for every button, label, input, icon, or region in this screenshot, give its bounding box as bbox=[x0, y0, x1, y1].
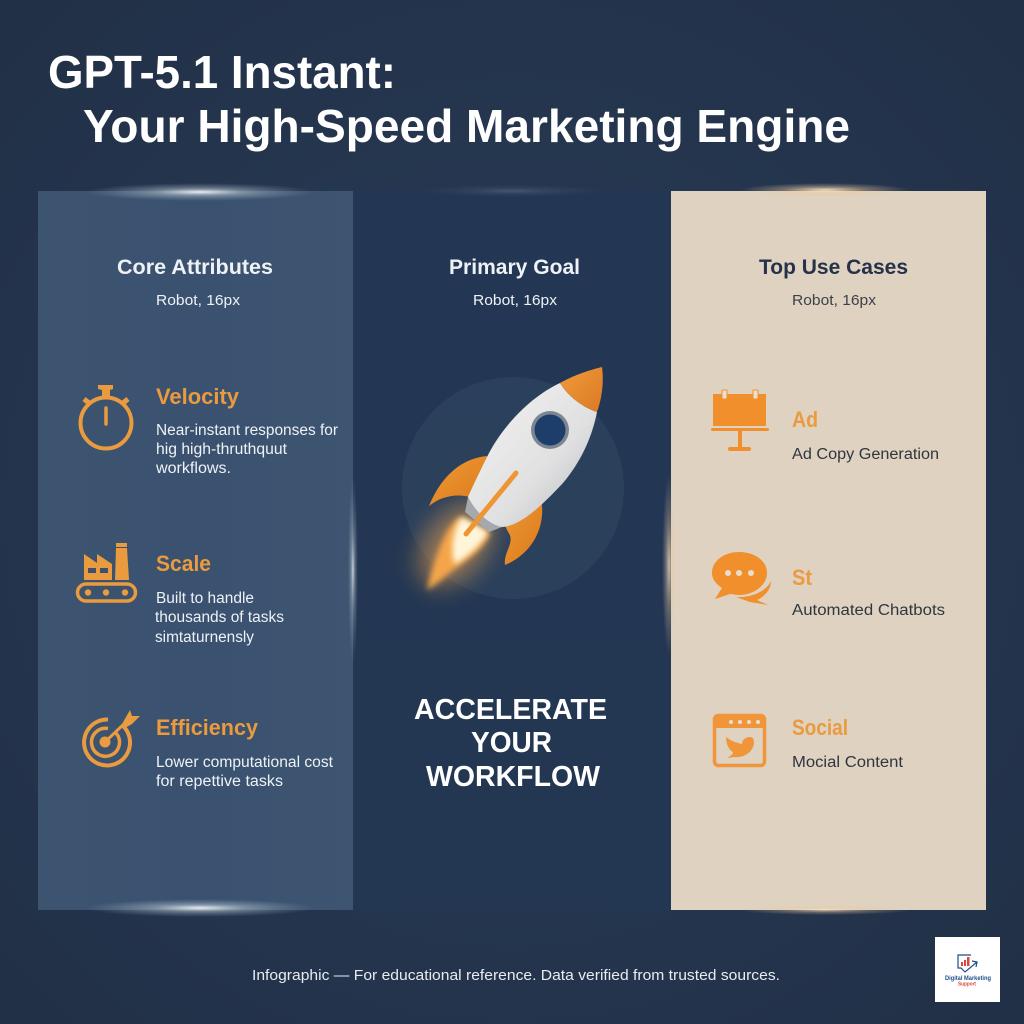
title: GPT-5.1 Instant: bbox=[48, 46, 396, 98]
item: st: St bbox=[792, 565, 813, 590]
item: velocity: workflows. bbox=[155, 460, 231, 477]
heading: top use cases: Top Use Cases bbox=[759, 256, 908, 279]
heading: primary goal: Primary Goal bbox=[449, 256, 580, 279]
logo: digital marketing support: Digital Marketing bbox=[945, 976, 991, 982]
icon: target with arrow bbox=[84, 710, 140, 765]
footer note: Infographic — For educational reference. Data verified from trusted sources. bbox=[252, 968, 780, 984]
logo: digital marketing support: Support bbox=[958, 982, 976, 988]
item: velocity bbox=[155, 384, 338, 477]
item: social bbox=[792, 715, 904, 771]
logo: digital marketing support bbox=[935, 937, 1000, 1002]
icon: chat bubbles bbox=[712, 552, 771, 605]
callout: accelerate your workflow: ACCELERATE bbox=[414, 694, 607, 726]
subheading: core attributes: Robot, 16px bbox=[156, 292, 241, 309]
subheading: top use cases: Robot, 16px bbox=[792, 292, 877, 309]
title bbox=[48, 46, 850, 152]
item: velocity: hig high-thruthquut bbox=[156, 441, 288, 458]
heading: core attributes: Core Attributes bbox=[117, 256, 273, 279]
item: velocity: Velocity bbox=[156, 384, 240, 409]
item: efficiency: Efficiency bbox=[156, 715, 259, 740]
callout: accelerate your workflow: YOUR bbox=[471, 727, 552, 759]
panel: core attributes bbox=[38, 191, 353, 910]
item: velocity: Near-instant responses for bbox=[156, 422, 338, 439]
title: Your High-Speed Marketing Engine bbox=[83, 100, 850, 152]
panel: top use cases bbox=[671, 191, 986, 910]
icon: factory on conveyor bbox=[78, 543, 136, 601]
subheading: primary goal: Robot, 16px bbox=[473, 292, 558, 309]
item: efficiency: for repettive tasks bbox=[156, 773, 283, 790]
item: social: Mocial Content bbox=[792, 754, 904, 771]
icon: browser with bird bbox=[714, 715, 765, 766]
item: st: Automated Chatbots bbox=[792, 602, 945, 619]
callout: accelerate your workflow bbox=[414, 694, 607, 793]
item: scale: simtaturnensly bbox=[155, 629, 254, 646]
icon: presentation board bbox=[711, 390, 769, 451]
panel: primary goal bbox=[353, 191, 671, 910]
item: scale: Built to handle bbox=[156, 590, 254, 607]
icon: rocket bbox=[402, 367, 624, 601]
item: efficiency bbox=[156, 715, 334, 790]
item: ad bbox=[792, 407, 939, 463]
callout: accelerate your workflow: WORKFLOW bbox=[426, 761, 601, 793]
item: scale: Scale bbox=[156, 551, 211, 576]
item: scale bbox=[155, 551, 284, 646]
item: ad: Ad bbox=[792, 407, 818, 432]
item: st bbox=[792, 565, 945, 619]
item: ad: Ad Copy Generation bbox=[792, 446, 939, 463]
item: efficiency: Lower computational cost bbox=[156, 754, 334, 771]
item: social: Social bbox=[792, 715, 848, 740]
item: scale: thousands of tasks bbox=[155, 609, 284, 626]
icon: stopwatch bbox=[80, 385, 132, 448]
